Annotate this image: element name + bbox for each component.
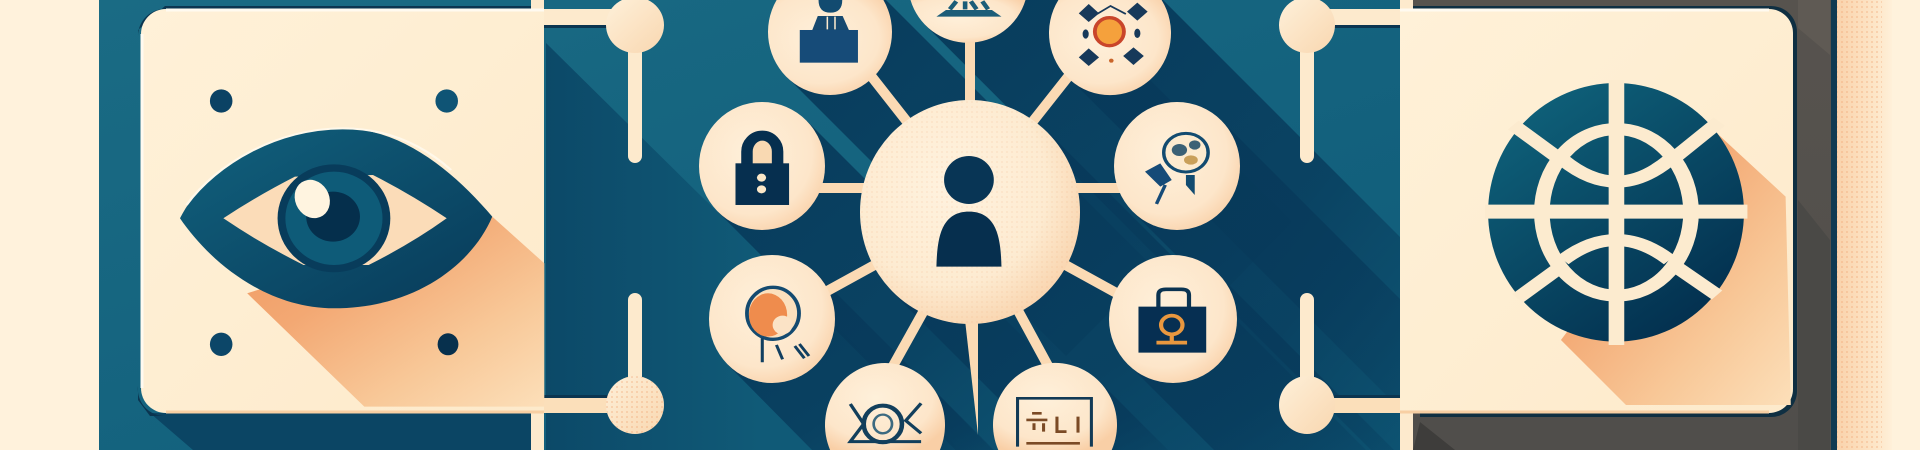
satellite: candy eye <box>825 363 945 450</box>
corner dots <box>210 89 458 356</box>
satellite: framed glyphs <box>993 363 1117 450</box>
satellite: orange ring <box>709 255 835 383</box>
background: grey right field <box>1413 0 1831 450</box>
hub: center circle with person <box>860 100 1080 324</box>
satellite: temple <box>910 0 1026 43</box>
right top node <box>1279 0 1335 163</box>
spoke connectors <box>815 40 1125 435</box>
right peach strip <box>1831 0 1892 450</box>
satellite: shopping bag <box>1109 255 1237 383</box>
panel: right globe card <box>1400 6 1797 417</box>
icon: person <box>936 156 1001 267</box>
left top node <box>606 0 664 163</box>
long diagonal shadows <box>546 0 1400 450</box>
satellite: magnifier globe <box>1114 102 1240 230</box>
eye drop shadow <box>247 217 544 407</box>
right bottom node <box>1279 293 1335 434</box>
right connector frame <box>1330 0 1413 450</box>
satellite: presenter <box>768 0 892 95</box>
left panel shadow <box>150 413 531 450</box>
icon: eye <box>180 128 492 308</box>
background: teal field <box>99 0 1400 450</box>
satellite: emblem <box>1049 0 1171 95</box>
left connector frame <box>531 0 614 450</box>
satellite: padlock <box>699 102 825 230</box>
panel: left eye card <box>138 6 544 416</box>
icon: globe <box>1485 80 1747 345</box>
grey field shadows <box>1413 0 1830 450</box>
left bottom node <box>606 293 664 434</box>
globe drop shadow <box>1561 133 1791 405</box>
